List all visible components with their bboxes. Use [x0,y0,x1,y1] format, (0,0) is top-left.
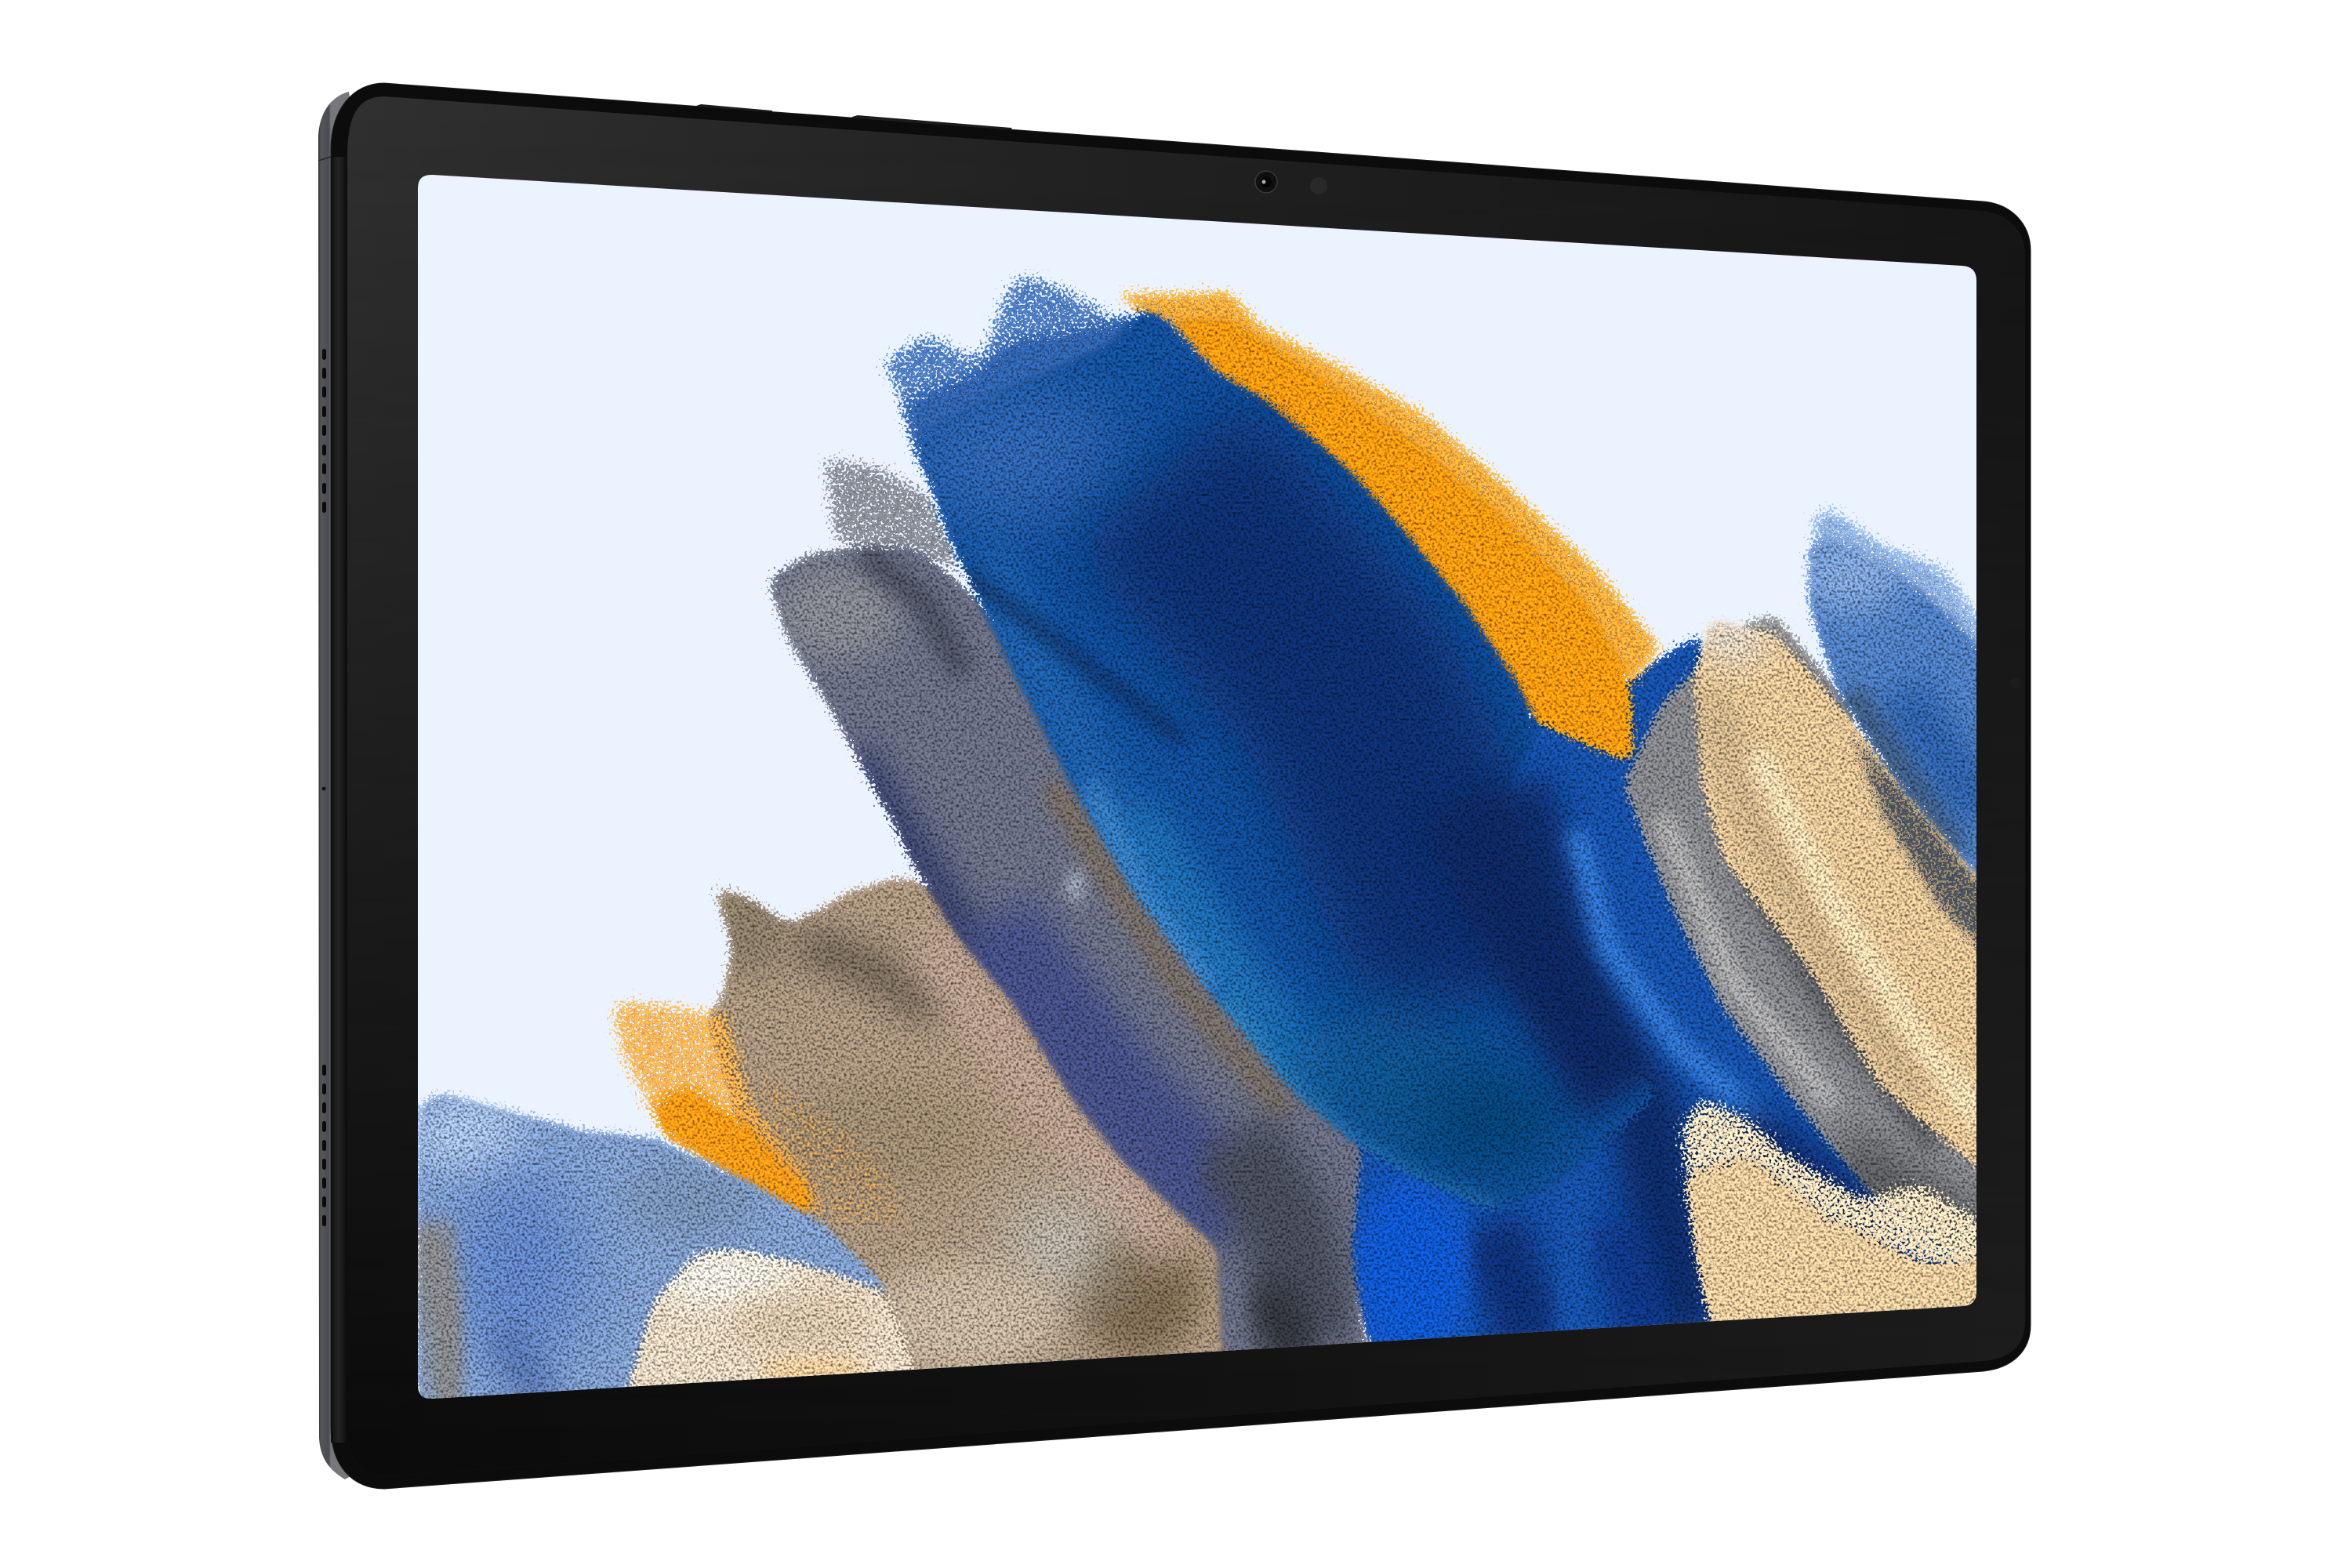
outer black rim [331,83,2031,1489]
feather: orange tuft spray [608,996,831,1223]
feather: gray strip [1625,615,1991,1286]
feather: beige [1696,604,1991,1176]
feather: light blue lower left [416,1094,894,1411]
feather: slate spray tip [820,455,972,572]
feather: main blue mid density [898,310,1141,478]
top side buttons [696,104,1013,132]
feather: orange tuft core [651,1082,815,1231]
metal side edge [318,92,368,1479]
tablet [318,83,2031,1489]
feather: orange spray fringe [1111,289,1663,688]
feather: main blue [902,310,1654,1214]
speaker grille lower [322,1065,326,1226]
feather: right blue [1795,533,1991,890]
speaker grille upper [322,349,326,513]
feather: right blue shadow specks [1842,721,1991,964]
left rim highlight [331,157,347,1443]
feather: orange solid [1168,321,1633,763]
feather: bright blue back strip [1325,633,1984,1364]
screen sky background [392,157,2007,1427]
right side sensor [2010,677,2021,688]
microphone hole [321,787,326,790]
front camera [1255,171,1277,193]
feather: cream patch [627,1250,925,1411]
beige patch spray [1679,1095,1991,1286]
feather: right blue spray tip [1809,505,1991,679]
feather: main blue spray tip [880,271,1137,431]
beige patch solid [1686,1156,1991,1356]
orange specks in tan [753,1058,917,1231]
feather: tan [703,870,1270,1403]
feather: slate indigo [769,547,1372,1380]
light sensor [1310,177,1327,194]
screen wallpaper [392,157,2007,1427]
glass bezel panel [347,96,2025,1476]
